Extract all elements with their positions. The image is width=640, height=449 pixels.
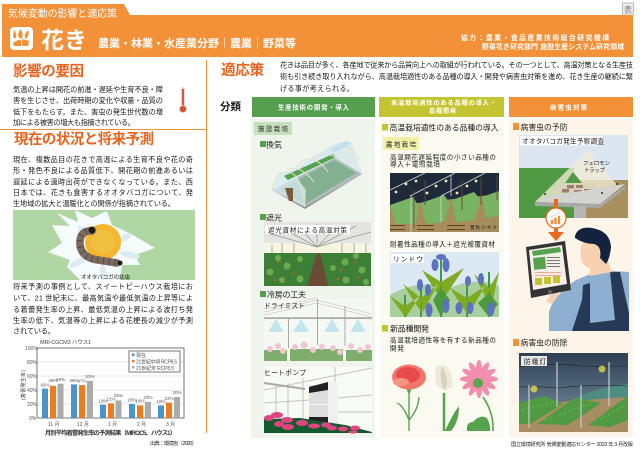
label: dry mist: ドライミスト — [264, 302, 305, 310]
legend — [129, 351, 180, 372]
subhead: prevention: 病害虫の予防 — [520, 122, 568, 132]
tag: open field — [383, 137, 419, 150]
title: 花き — [41, 27, 87, 53]
value labels: 48% — [69, 378, 79, 383]
subhead: ventilation: 換気 — [266, 140, 282, 150]
y axis labels: 0% — [29, 416, 37, 422]
panel: pest control — [509, 97, 633, 437]
text: factors: 気温の上昇は開花の前進・遅延や生育不良・障 — [13, 85, 163, 94]
text: factors: 害を生じさせ、出荷時期の変化や収量・品質の — [13, 96, 163, 105]
subhead: shading — [260, 212, 282, 222]
illustration: caterpillar on flower — [13, 210, 195, 281]
icon: thermometer — [180, 87, 186, 112]
text: adaptation: 花きは品目が多く、各産地で従来から品質向上への取組が行われている。その一つとして、高温対策となる生産技 — [280, 60, 633, 70]
value labels: 20% — [127, 398, 137, 402]
text: future projection — [13, 282, 193, 336]
panel: production technology — [251, 97, 375, 438]
value labels: 49% — [56, 377, 65, 382]
text: adaptation: 術も引き続き取り入れながら、高温栽培適性のある品種の導入・開発や病害虫対策を進め、花き生産の継続に繋 — [280, 72, 633, 81]
bars: mid century — [50, 385, 172, 418]
panel: heat tolerant varieties — [379, 97, 504, 438]
y axis labels: 80% — [27, 360, 38, 366]
icon: flower — [10, 27, 33, 50]
column header: 生産技術の開発・導入 — [278, 102, 350, 112]
label: insect lamp: 防蛾灯 — [524, 357, 546, 366]
month labels: 12 月 — [77, 422, 89, 428]
month labels: 2 月 — [137, 422, 146, 428]
tag: greenhouse cultivation — [254, 122, 292, 135]
tag: greenhouse cultivation: 施設栽培 — [258, 124, 289, 133]
month labels: 1 月 — [108, 422, 117, 428]
column header: 高温栽培適性のある品種の導入・ — [391, 99, 496, 107]
text: variety note — [390, 152, 496, 168]
value labels: 22% — [164, 396, 174, 401]
subhead: control: 病害虫の防除 — [520, 338, 568, 348]
text: future projection: 将来予測の事例として、スイートピーハウス栽培にお — [13, 282, 193, 291]
header band — [2, 4, 633, 57]
heading: current and future: 現在の状況と将来予測 — [14, 130, 154, 148]
illustration: gerbera — [460, 360, 498, 431]
month labels: 3 月 — [166, 422, 175, 428]
bar chart: flower bud rate: MRI-CGCM3 ハウス1 — [40, 338, 91, 346]
caption: summer chrysanthemum: 夏秋小ギク — [470, 224, 497, 231]
text: future projection: 生率の低下、気温等の上昇による花梗長の減少が予測 — [13, 316, 193, 325]
text: future projection: る着蕾発生率の上昇、最低気温の上昇による波打ち発 — [13, 305, 193, 314]
text: variety note: 高温開花遅延程度の小さい品種の — [390, 152, 496, 162]
value labels: 19% — [98, 398, 108, 404]
y axis labels: 40% — [27, 388, 38, 394]
column header — [252, 97, 375, 117]
text: adaptation — [280, 60, 633, 93]
text: current — [13, 155, 193, 208]
badge: table — [622, 3, 634, 14]
value labels: 21% — [106, 396, 116, 402]
y axis labels: 60% — [27, 374, 38, 380]
heading: factors: 影響の要因 — [13, 62, 84, 80]
bar chart: flower bud rate — [20, 338, 184, 437]
value labels: 23% — [143, 395, 153, 400]
month labels: 11 月 — [48, 422, 60, 428]
tag: open field: 露地栽培 — [386, 140, 417, 148]
chart caption: 月別平均着蕾発生率の予測結果（MIROC5、ハウス1） — [45, 429, 176, 437]
text: factors: 加による被害の増大も指摘されている。 — [13, 118, 135, 127]
month labels — [48, 422, 175, 428]
bars: end of century — [58, 381, 180, 418]
text: adaptation: げる事が考えられる。 — [280, 84, 354, 93]
value labels: 18% — [135, 398, 145, 404]
value labels: 47% — [77, 378, 87, 384]
column dividers — [0, 60, 207, 433]
illustration: greenhouse — [272, 141, 362, 209]
value labels: 25% — [114, 393, 123, 398]
text: new varieties note: 高温栽培適性等を有する新品種の — [390, 336, 496, 344]
heading: adaptation: 適応策 — [221, 61, 264, 79]
illustration: tulip — [435, 365, 459, 431]
source note: 出典：環境省（2020） — [150, 439, 197, 447]
y axis labels: 100% — [25, 346, 38, 352]
label: pheromone trap: トラップ — [584, 167, 605, 174]
cooperation credit — [461, 33, 624, 51]
footer credit: 国立環境研究所 気候変動適応センター 2022 年 3 月改版 — [511, 440, 634, 448]
y axis labels: 20% — [27, 402, 38, 408]
text: current: 生地域の拡大と温暖化との関係が指摘されている。 — [13, 199, 175, 208]
subhead: cooling: 冷房の工夫 — [267, 290, 306, 300]
text: current: 形・発色不良による品質低下、開花期の前進あるいは — [13, 166, 193, 175]
label: gentian: リンドウ — [393, 256, 423, 264]
illustration: pheromone trap — [519, 135, 628, 218]
label: heat pump: ヒートポンプ — [264, 369, 306, 377]
subhead: new varieties: 新品種開発 — [390, 324, 429, 334]
text: future projection: されている。 — [13, 326, 55, 336]
subhead: ventilation — [260, 140, 282, 150]
text: factors: 低下をもたらす。また、害虫の発生世代数の増 — [13, 108, 163, 116]
value labels: 46% — [48, 378, 58, 383]
text: new varieties note: 開発 — [390, 344, 404, 352]
illustration: shading materials — [264, 222, 371, 286]
illustration: heat pump — [264, 367, 372, 434]
column header: 品種開発 — [429, 107, 457, 115]
column header — [379, 97, 504, 117]
value labels: 53% — [85, 374, 95, 379]
text: current: 現在、複数品目の花きで高温による生育不良や花の奇 — [13, 155, 193, 164]
value labels: 42% — [40, 382, 50, 388]
y axis labels — [20, 346, 38, 422]
value labels — [40, 374, 182, 404]
illustration: farmer with tablet — [526, 228, 629, 331]
label: survey: オオタバコガ発生予察調査 — [522, 136, 604, 146]
label: pheromone trap — [583, 160, 610, 174]
sector path: 農業・林業・水産業分野｜農業｜野菜等 — [98, 36, 296, 50]
cooperation credit: 野菜花き研究部門 施設生産システム研究領域 — [482, 42, 624, 51]
column header — [509, 97, 633, 117]
label: pheromone trap: フェロモン — [583, 160, 610, 167]
text: current: 遅延による適時出荷ができなくなっている。また、西 — [13, 178, 193, 186]
subhead: introduction: 高温栽培適性のある品種の導入 — [390, 122, 499, 132]
subhead: shading: 遮光 — [266, 212, 282, 222]
y axis labels: (着蕾発生率) — [20, 370, 27, 400]
text: new varieties note — [390, 336, 496, 352]
illustration: dry mist — [264, 298, 372, 361]
value labels: 30% — [172, 390, 182, 395]
text: heat tolerant note: 耐暑性品種の導入＋遮光被覆資材 — [390, 240, 495, 248]
text: factors — [13, 85, 163, 127]
illustration: insect control lamps — [519, 353, 628, 432]
arrow: data to tablet — [546, 199, 566, 241]
legend: 21世紀末 RCP8.5 — [136, 365, 174, 372]
column header: 病害虫対策 — [550, 102, 588, 112]
illustration: night lighting field — [390, 173, 499, 232]
label: classification: 分類 — [220, 100, 242, 113]
text: future projection: いて、21 世紀末に、最高気温や最低気温の上昇等によ — [13, 294, 193, 302]
legend: 21世紀中頃 RCP8.5 — [136, 358, 177, 366]
legend: 現在 — [136, 352, 146, 359]
cooperation credit: 協力：農業・食品産業技術総合研究機構 — [461, 33, 609, 42]
illustration: gentian — [390, 252, 499, 317]
text: variety note: 導入＋電照栽培 — [390, 160, 440, 168]
text: current: 日本では、花きも食害するオオタバコガについて、発 — [13, 188, 193, 197]
bars: present — [42, 384, 164, 418]
illustration: carnation — [392, 364, 426, 431]
badge: table: 表 — [624, 4, 632, 14]
value labels: 18% — [156, 399, 166, 404]
label: shading: 遮光資材による高温対策 — [268, 226, 347, 234]
caption: caterpillar: オオタバコガの幼虫 — [81, 273, 130, 281]
series label: 気候変動の影響と適応策 — [8, 7, 117, 20]
